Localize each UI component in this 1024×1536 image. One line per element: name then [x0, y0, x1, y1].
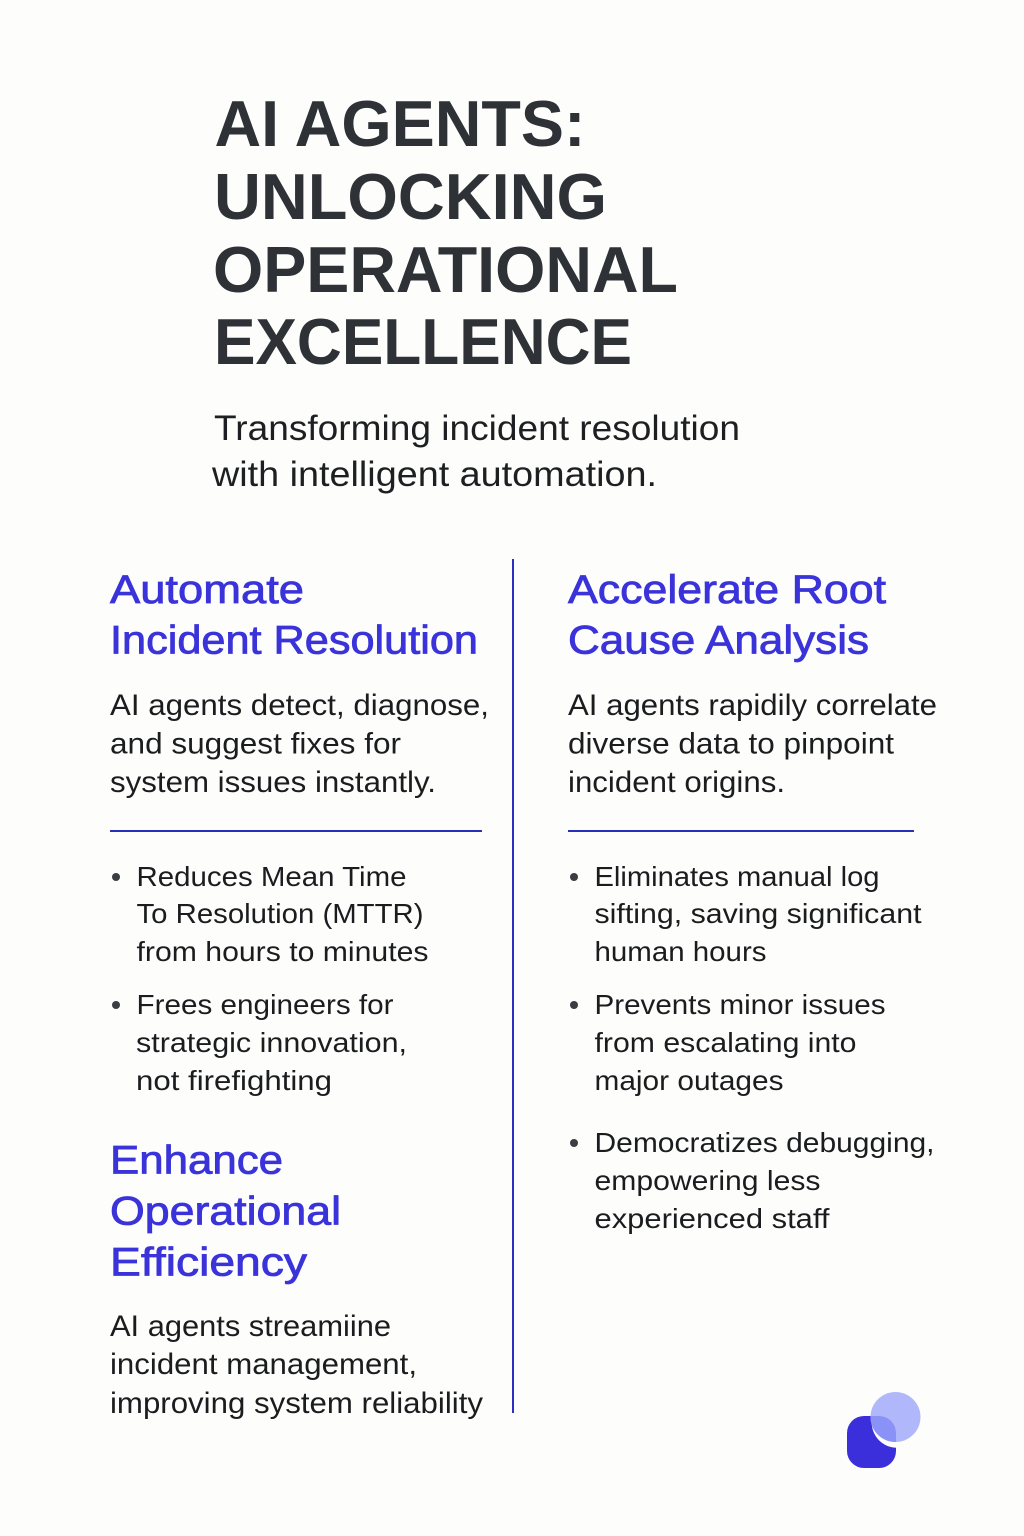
rule: accelerate: [568, 830, 914, 832]
column divider: [512, 559, 514, 1413]
bullet: reduces MTTR: from hours to minutes: [136, 936, 428, 967]
text: enhance description: AI agents streamiine: [110, 1310, 391, 1343]
bullet: eliminates log sifting: sifting, saving significant: [594, 898, 922, 929]
heading: accelerate root cause analysis: [568, 568, 886, 662]
bullet: reduces MTTR: To Resolution (MTTR): [136, 898, 424, 929]
subtitle: [211, 409, 740, 494]
bullet: frees engineers: not firefighting: [136, 1065, 332, 1096]
heading: automate incident resolution: [110, 568, 478, 662]
panel: enhance operational efficiency: [110, 1138, 483, 1420]
bullet: frees engineers: strategic innovation,: [136, 1027, 407, 1058]
bullet: prevents minor issues: Prevents minor issues: [594, 989, 886, 1020]
bullet: reduces MTTR: Reduces Mean Time: [136, 861, 406, 892]
title: [213, 87, 678, 378]
text: enhance description: [110, 1310, 483, 1420]
bullet: frees engineers: [112, 989, 407, 1096]
text: enhance description: improving system reliability: [110, 1387, 483, 1420]
text: automate description: AI agents detect, diagnose,: [110, 689, 489, 722]
title: EXCELLENCE: [214, 305, 632, 378]
title: UNLOCKING: [214, 160, 607, 233]
text: automate description: system issues instantly.: [110, 766, 436, 799]
text: automate description: [110, 689, 489, 799]
text: accelerate description: diverse data to pinpoint: [568, 728, 895, 760]
text: accelerate description: AI agents rapidily correlate: [568, 689, 937, 722]
bullet: prevents minor issues: [570, 989, 886, 1096]
bullet: frees engineers: Frees engineers for: [136, 989, 394, 1020]
heading: automate incident resolution: Automate: [110, 568, 304, 612]
subtitle: with intelligent automation.: [211, 455, 657, 494]
bullet: democratizes debugging: empowering less: [594, 1165, 820, 1196]
bullet: democratizes debugging: Democratizes debugging,: [594, 1127, 934, 1158]
heading: enhance operational efficiency: [110, 1138, 341, 1284]
bullet: eliminates log sifting: [570, 861, 922, 967]
bullet: democratizes debugging: experienced staff: [594, 1203, 830, 1234]
text: accelerate description: incident origins.: [568, 766, 785, 799]
bullet: eliminates log sifting: Eliminates manual log: [594, 861, 880, 892]
bullet: eliminates log sifting: human hours: [594, 936, 766, 967]
heading: automate incident resolution: Incident Resolution: [110, 618, 478, 662]
heading: enhance operational efficiency: Operational: [110, 1190, 341, 1234]
bullet: prevents minor issues: from escalating into: [594, 1027, 856, 1058]
bullet: reduces MTTR: [112, 861, 428, 967]
heading: enhance operational efficiency: Efficiency: [110, 1240, 307, 1284]
panel: accelerate root cause analysis: [568, 568, 937, 1234]
panel: automate incident resolution: [110, 568, 489, 1096]
heading: accelerate root cause analysis: Accelerate Root: [568, 568, 886, 612]
subtitle: Transforming incident resolution: [214, 409, 740, 448]
text: accelerate description: [568, 689, 937, 799]
heading: accelerate root cause analysis: Cause Analysis: [568, 618, 869, 662]
heading: enhance operational efficiency: Enhance: [110, 1138, 283, 1182]
bullet: democratizes debugging: [570, 1127, 934, 1234]
title: AI AGENTS:: [214, 87, 586, 160]
text: automate description: and suggest fixes for: [110, 728, 401, 760]
title: OPERATIONAL: [213, 233, 678, 306]
icon: overlapping shapes logo: [847, 1392, 922, 1468]
bullet: prevents minor issues: major outages: [594, 1065, 784, 1096]
text: enhance description: incident management,: [110, 1348, 417, 1381]
rule: automate: [110, 830, 482, 832]
